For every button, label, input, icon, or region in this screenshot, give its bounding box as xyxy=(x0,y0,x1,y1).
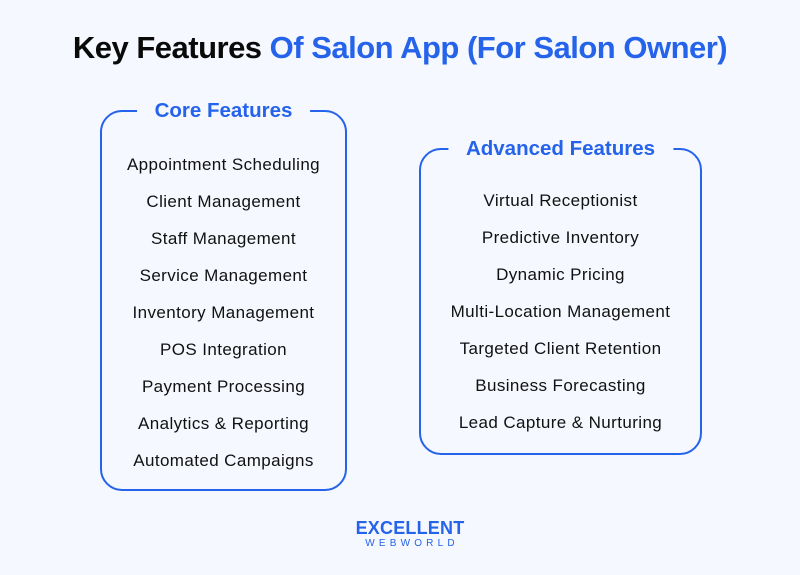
panel: core features xyxy=(100,110,347,491)
panel: advanced features: Virtual Receptionist xyxy=(483,191,638,210)
panel: core features: Payment Processing xyxy=(142,377,305,396)
panel: advanced features xyxy=(419,148,702,455)
panel: core features: Automated Campaigns xyxy=(133,451,314,470)
panel: core features: POS Integration xyxy=(160,340,287,359)
list: advanced features xyxy=(451,191,670,432)
panel: core features: Client Management xyxy=(146,192,301,211)
panel: core features: Inventory Management xyxy=(133,303,314,322)
panel: core features: Appointment Scheduling xyxy=(127,155,320,174)
panel: advanced features: Lead Capture & Nurturing xyxy=(459,413,662,432)
logo: WEBWORLD xyxy=(365,538,459,549)
logo: EXCELLENT xyxy=(356,518,464,538)
list: core features xyxy=(127,155,320,470)
panel: advanced features: Targeted Client Retention xyxy=(460,339,661,358)
panel: advanced features: Dynamic Pricing xyxy=(496,265,625,284)
panel: core features: Analytics & Reporting xyxy=(138,414,309,433)
panel: advanced features: Business Forecasting xyxy=(475,376,646,395)
heading: advanced features: Advanced Features xyxy=(466,137,655,160)
panel: advanced features: Multi-Location Management xyxy=(451,302,670,321)
logo xyxy=(356,518,464,549)
heading: core features: Core Features xyxy=(155,99,292,122)
panel: core features: Service Management xyxy=(140,266,307,285)
panel: advanced features: Predictive Inventory xyxy=(482,228,639,247)
panel: core features: Staff Management xyxy=(151,229,296,248)
title: Key Features Of Salon App (For Salon Owner) xyxy=(73,30,727,65)
